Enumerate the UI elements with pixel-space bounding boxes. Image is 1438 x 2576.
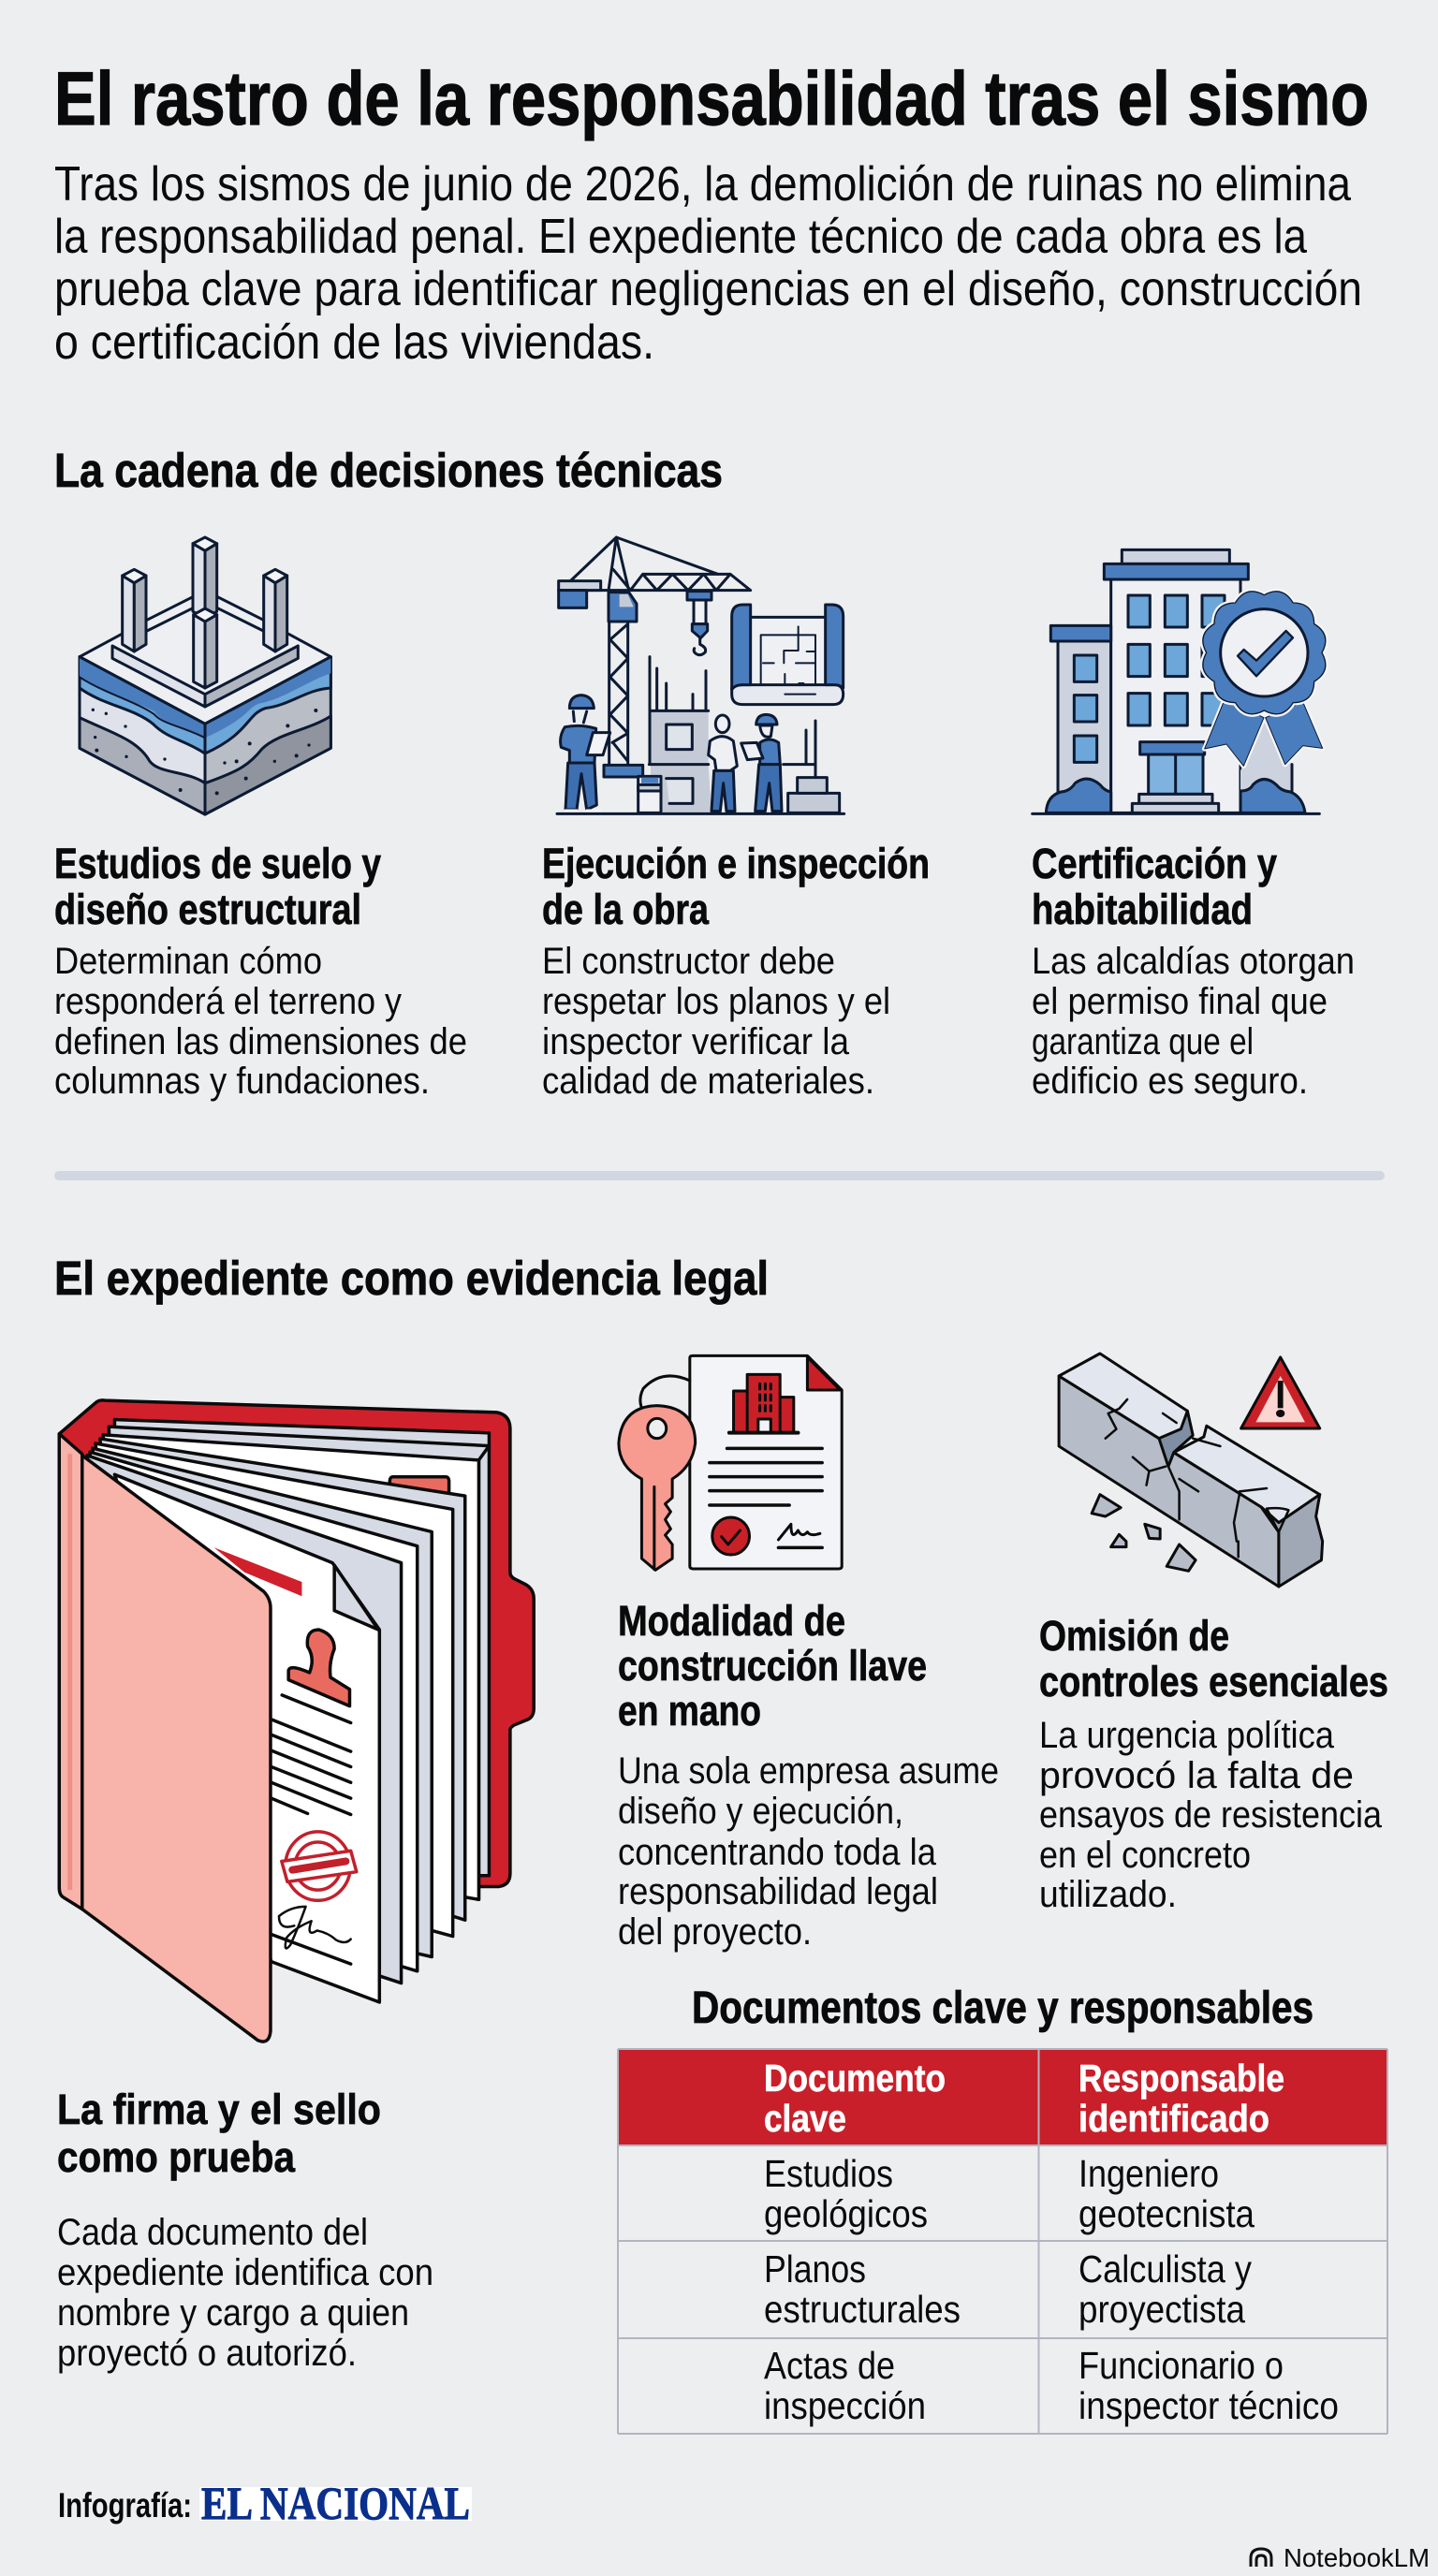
table row 2: Calculista y — [1078, 2247, 1252, 2291]
column: right — [264, 569, 287, 651]
table heading: Documentos clave y responsables — [692, 1983, 1313, 2033]
card text: omisión de controles: Omisión de — [1039, 1612, 1229, 1660]
worker 2 — [709, 715, 737, 812]
card text: firma y sello: La firma y el sello — [57, 2086, 381, 2133]
table row 3 — [764, 2344, 1339, 2427]
table header: clave — [764, 2097, 846, 2140]
column: left — [123, 569, 146, 651]
card text: firma y sello: expediente identifica con — [57, 2252, 433, 2293]
card text: modalidad llave en mano: responsabilidad legal — [618, 1871, 938, 1912]
card text: modalidad llave en mano: concentrando toda la — [618, 1832, 937, 1873]
card text: certificación: Las alcaldías otorgan — [1032, 941, 1355, 982]
card text: omisión de controles — [1039, 1612, 1388, 1915]
front cover — [59, 1434, 271, 2042]
column: back — [193, 537, 217, 618]
card text: ejecución e inspección: calidad de materiales. — [542, 1061, 874, 1102]
icon: open folder with documents — [59, 1400, 534, 2042]
card text: modalidad llave en mano: construcción llave — [618, 1642, 927, 1690]
logo: el nacional: EL NACIONAL — [201, 2477, 470, 2529]
card text: ejecución e inspección: El constructor debe — [542, 941, 835, 982]
card text: ejecución e inspección — [542, 840, 930, 1102]
table row 2: Planos — [764, 2247, 866, 2291]
intro text block: o certificación de las viviendas. — [54, 315, 654, 370]
card text: estudios de suelo: definen las dimensiones de — [54, 1021, 467, 1062]
stamp — [288, 1630, 349, 1706]
barrel — [638, 776, 661, 812]
table row 3: inspección — [764, 2384, 926, 2427]
intro text block — [54, 157, 1362, 370]
card text: certificación — [1032, 840, 1355, 1102]
table header — [764, 2056, 1284, 2140]
table header: Responsable — [1078, 2056, 1284, 2100]
icon: certified building with badge — [1033, 549, 1326, 813]
table row 1 — [764, 2152, 1255, 2235]
card text: modalidad llave en mano: diseño y ejecución, — [618, 1791, 903, 1832]
table row 3: inspector técnico — [1078, 2384, 1339, 2427]
card text: ejecución e inspección: de la obra — [542, 886, 710, 933]
card text: modalidad llave en mano — [618, 1597, 999, 1953]
card text: certificación: el permiso final que — [1032, 981, 1328, 1022]
icon: key and contract — [619, 1355, 842, 1570]
card text: omisión de controles: La urgencia política — [1039, 1715, 1335, 1756]
table row 2: proyectista — [1078, 2288, 1245, 2331]
card text: certificación: Certificación y — [1032, 840, 1277, 887]
card text: firma y sello — [57, 2086, 433, 2374]
card text: estudios de suelo: columnas y fundaciones. — [54, 1061, 430, 1102]
table row 3: Actas de — [764, 2344, 895, 2387]
icon: soil layers and foundation — [80, 537, 330, 814]
credit: infografía: Infografía: — [58, 2486, 192, 2525]
building mark — [729, 1374, 798, 1433]
card text: modalidad llave en mano: Modalidad de — [618, 1597, 845, 1645]
windows — [1074, 595, 1225, 762]
heading: cadena de decisiones: La cadena de decisiones técnicas — [54, 444, 723, 497]
badge — [1203, 592, 1326, 766]
card text: estudios de suelo: Determinan cómo — [54, 941, 322, 982]
card text: omisión de controles: provocó la falta de — [1039, 1755, 1354, 1796]
icon: cracked concrete beam and warning — [1059, 1354, 1323, 1587]
card text: modalidad llave en mano: Una sola empresa asume — [618, 1750, 999, 1792]
card text: estudios de suelo: diseño estructural — [54, 886, 361, 933]
card text: firma y sello: como prueba — [57, 2133, 296, 2181]
watermark: notebooklm: NotebookLM — [1284, 2543, 1430, 2572]
table header: identificado — [1078, 2097, 1269, 2140]
table row 2: estructurales — [764, 2288, 961, 2331]
panel: technical decision cards — [54, 840, 1355, 1102]
table header: Documento — [764, 2056, 946, 2100]
card text: modalidad llave en mano: del proyecto. — [618, 1911, 812, 1953]
card text: ejecución e inspección: Ejecución e inspección — [542, 840, 930, 887]
column: front — [194, 608, 217, 688]
card text: ejecución e inspección: respetar los planos y el — [542, 981, 890, 1022]
worker 1 — [561, 695, 610, 811]
card text: certificación: garantiza que el — [1032, 1021, 1254, 1062]
table row 1: Estudios — [764, 2152, 893, 2195]
warning triangle — [1241, 1357, 1320, 1428]
blueprint — [732, 605, 844, 705]
rubble — [1092, 1495, 1196, 1571]
card text: omisión de controles: en el concreto — [1039, 1835, 1251, 1876]
worker 3 — [741, 714, 782, 812]
card text: certificación: habitabilidad — [1032, 886, 1253, 933]
heading: expediente como evidencia: El expediente como evidencia legal — [54, 1251, 769, 1305]
card text: modalidad llave en mano: en mano — [618, 1687, 761, 1734]
document page — [114, 1474, 379, 2002]
table row 2 — [764, 2247, 1252, 2331]
card text: estudios de suelo: responderá el terreno y — [54, 981, 402, 1022]
table: documentos y responsables — [618, 2049, 1387, 2434]
table row 1: Ingeniero — [1078, 2152, 1219, 2195]
card text: firma y sello: Cada documento del — [57, 2212, 368, 2253]
card text: estudios de suelo: Estudios de suelo y — [54, 840, 381, 887]
card text: omisión de controles: utilizado. — [1039, 1874, 1177, 1915]
table row 1: geológicos — [764, 2192, 928, 2235]
card text: firma y sello: proyectó o autorizó. — [57, 2333, 357, 2374]
card text: certificación: edificio es seguro. — [1032, 1061, 1308, 1102]
seal — [282, 1832, 357, 1900]
table row 1: geotecnista — [1078, 2192, 1255, 2235]
card text: ejecución e inspección: inspector verificar la — [542, 1021, 850, 1062]
key — [619, 1376, 696, 1570]
card text: omisión de controles: ensayos de resistencia — [1039, 1794, 1383, 1836]
table row 3: Funcionario o — [1078, 2344, 1284, 2387]
card text: estudios de suelo — [54, 840, 467, 1102]
icon: crane, workers and blueprint — [557, 537, 844, 813]
signature — [279, 1907, 351, 1948]
card text: firma y sello: nombre y cargo a quien — [57, 2292, 409, 2334]
